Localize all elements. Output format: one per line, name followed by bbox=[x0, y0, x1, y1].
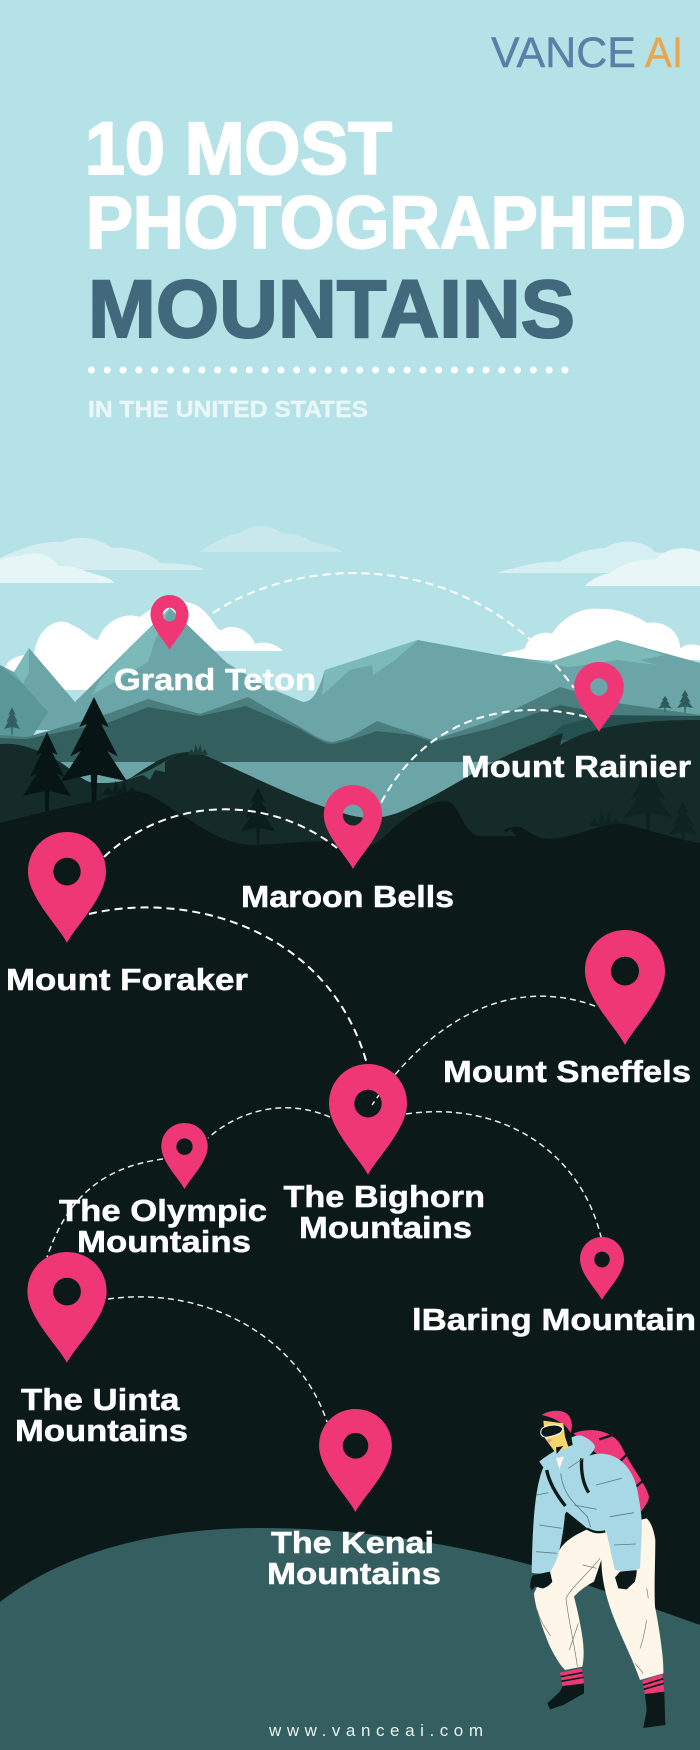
logo: Vance AI: AI bbox=[645, 29, 683, 77]
label: The Uinta Mountains bbox=[15, 1382, 188, 1448]
pin: The Kenai Mountains bbox=[319, 1409, 392, 1512]
hiker: trouser creases bbox=[537, 1558, 648, 1673]
label: lBaring Mountain: lBaring Mountain bbox=[412, 1302, 696, 1337]
label: The Bighorn Mountains: The Bighorn bbox=[284, 1179, 485, 1214]
title bbox=[85, 107, 686, 355]
label: The Kenai Mountains: The Kenai bbox=[271, 1525, 434, 1560]
pin: Maroon Bells bbox=[324, 785, 382, 869]
dashed route lines bbox=[47, 573, 601, 1422]
hiker: collar shirt bbox=[556, 1457, 564, 1469]
subtitle: IN THE UNITED STATES bbox=[88, 396, 368, 422]
hiker: socks bbox=[560, 1668, 664, 1695]
hiker: hat bbox=[542, 1411, 572, 1433]
foreground ground bbox=[0, 792, 700, 1750]
label: The Kenai Mountains bbox=[267, 1525, 441, 1591]
label: The Olympic Mountains: Mountains bbox=[77, 1224, 251, 1259]
label: The Olympic Mountains: The Olympic bbox=[59, 1193, 267, 1228]
hiker: backpack straps bbox=[547, 1458, 589, 1506]
hiker: trousers bbox=[534, 1518, 663, 1680]
footer url: www.vanceai.com bbox=[268, 1721, 483, 1740]
pin: Mount Rainier bbox=[574, 662, 624, 732]
clouds: white clouds behind peaks bbox=[5, 601, 700, 690]
hiker: gloves bbox=[530, 1570, 637, 1591]
trees bbox=[4, 690, 697, 844]
dotted divider bbox=[92, 366, 568, 374]
label: The Bighorn Mountains bbox=[284, 1179, 485, 1245]
pin: Mount Sneffels bbox=[585, 930, 665, 1045]
grass tufts on ground bbox=[480, 823, 516, 836]
title: 10 MOST bbox=[85, 107, 392, 190]
hiker: goggles bbox=[541, 1425, 563, 1437]
label: Grand Teton: Grand Teton bbox=[114, 662, 316, 697]
bottom hill bbox=[0, 1528, 700, 1750]
clouds: pale sky clouds bbox=[0, 526, 700, 586]
label: The Uinta Mountains: The Uinta bbox=[21, 1382, 180, 1417]
sky background bbox=[0, 0, 700, 900]
pin: Baring Mountain bbox=[580, 1237, 624, 1300]
hiker: jacket bbox=[532, 1436, 642, 1574]
title: MOUNTAINS bbox=[88, 264, 575, 355]
label: Mount Rainier: Mount Rainier bbox=[461, 749, 691, 784]
hiker: waistband bbox=[587, 1529, 605, 1532]
label: The Bighorn Mountains: Mountains bbox=[299, 1210, 472, 1245]
label: Mount Foraker: Mount Foraker bbox=[6, 962, 248, 997]
pin: The Bighorn Mountains bbox=[329, 1064, 407, 1175]
lake bbox=[0, 762, 700, 872]
grass tufts bbox=[0, 744, 621, 826]
label: The Kenai Mountains: Mountains bbox=[267, 1556, 441, 1591]
logo: Vance AI: VANCE bbox=[491, 29, 636, 77]
pin: Grand Teton bbox=[150, 595, 188, 650]
illustration: hiker bbox=[530, 1411, 665, 1728]
hiker: backpack bbox=[573, 1430, 649, 1512]
hiker: face and hair bbox=[543, 1421, 573, 1454]
hiker: dark underlayer bbox=[550, 1470, 606, 1586]
mountains: middle range bbox=[0, 687, 700, 790]
hiker: jacket creases bbox=[536, 1458, 636, 1553]
pin: Mount Foraker bbox=[28, 832, 106, 943]
pin: The Olympic Mountains bbox=[161, 1123, 208, 1189]
label: Maroon Bells: Maroon Bells bbox=[241, 879, 454, 914]
hills: dark middle ground bbox=[0, 715, 700, 900]
label: Mount Sneffels: Mount Sneffels bbox=[443, 1054, 691, 1089]
label: The Olympic Mountains bbox=[59, 1193, 267, 1259]
title: PHOTOGRAPHED bbox=[86, 181, 686, 264]
mountains: far range bbox=[0, 608, 700, 800]
pin: The Uinta Mountains bbox=[27, 1252, 107, 1363]
hiker: boots bbox=[547, 1683, 665, 1728]
label: The Uinta Mountains: Mountains bbox=[15, 1413, 188, 1448]
